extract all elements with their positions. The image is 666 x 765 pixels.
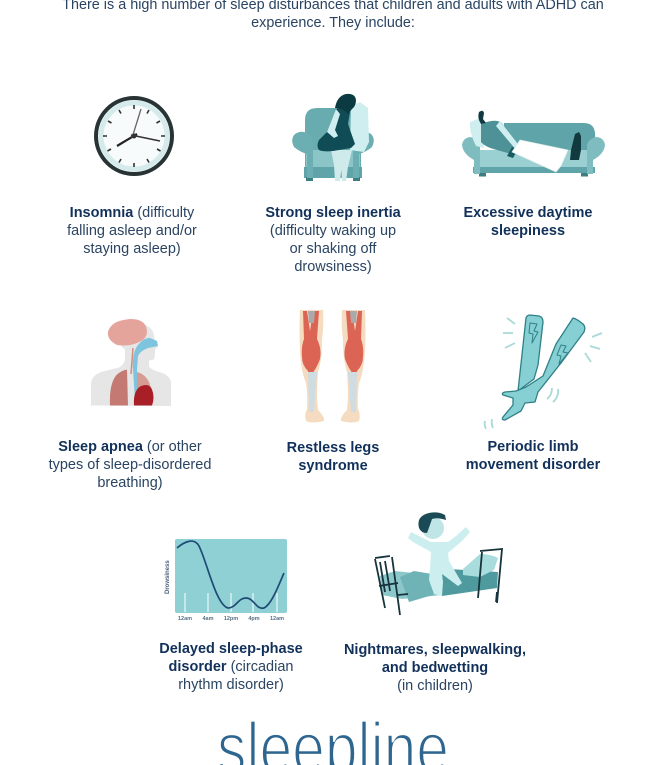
icon: wall clock [96, 98, 172, 174]
label: insomnia: falling asleep and/or [67, 223, 197, 239]
x axis labels: 4am [202, 616, 214, 622]
x axis labels: 12pm [224, 616, 238, 622]
label: sleep apnea: breathing) [97, 475, 163, 491]
label: insomnia: staying asleep) [83, 241, 181, 257]
label: daytime sleepiness [464, 205, 592, 239]
label: sleep apnea: types of sleep-disordered [49, 457, 211, 473]
icon: twitching legs [485, 315, 602, 429]
label: sleep apnea [48, 439, 211, 491]
label: nightmares: and bedwetting [382, 660, 488, 676]
label: delayed sleep phase [159, 641, 303, 693]
label: insomnia [67, 205, 197, 257]
label: periodic limb: Periodic limb [487, 439, 579, 455]
x axis labels [178, 616, 284, 622]
label: nightmares: (in children) [397, 678, 473, 694]
label: daytime sleepiness: sleepiness [491, 223, 565, 239]
label: sleep inertia [265, 205, 401, 275]
label: sleep apnea: Sleep apnea (or other [58, 439, 202, 455]
label: sleep inertia: drowsiness) [294, 259, 372, 275]
icon: woman on armchair [292, 94, 374, 181]
label: restless legs: Restless legs [287, 440, 379, 456]
label: sleep inertia: or shaking off [290, 241, 376, 257]
label: insomnia: Insomnia (difficulty [70, 205, 194, 221]
label: nightmares: Nightmares, sleepwalking, [344, 642, 526, 658]
label: sleep inertia: Strong sleep inertia [265, 205, 401, 221]
chart: drowsiness over day [165, 539, 287, 622]
label: daytime sleepiness: Excessive daytime [464, 205, 592, 221]
label: restless legs [287, 440, 379, 474]
intro text [62, 0, 604, 30]
label: nightmares [344, 642, 526, 694]
label: periodic limb: movement disorder [466, 457, 600, 473]
intro text: experience. They include: [251, 14, 415, 30]
label: delayed sleep phase: rhythm disorder) [178, 677, 284, 693]
icon: man on sofa [462, 111, 605, 176]
x axis labels: 4pm [248, 616, 260, 622]
label: sleep inertia: (difficulty waking up [270, 223, 396, 239]
label: periodic limb [466, 439, 600, 473]
icon: child on bed [375, 512, 502, 615]
icon: leg muscles [300, 310, 366, 422]
icon: respiratory anatomy [91, 319, 171, 406]
label: delayed sleep phase: disorder (circadian [169, 659, 293, 675]
x axis labels: 12am [270, 616, 284, 622]
label: delayed sleep phase: Delayed sleep-phase [159, 641, 303, 657]
y axis label: Drowsiness [165, 560, 171, 594]
x axis labels: 12am [178, 616, 192, 622]
label: restless legs: syndrome [298, 458, 368, 474]
